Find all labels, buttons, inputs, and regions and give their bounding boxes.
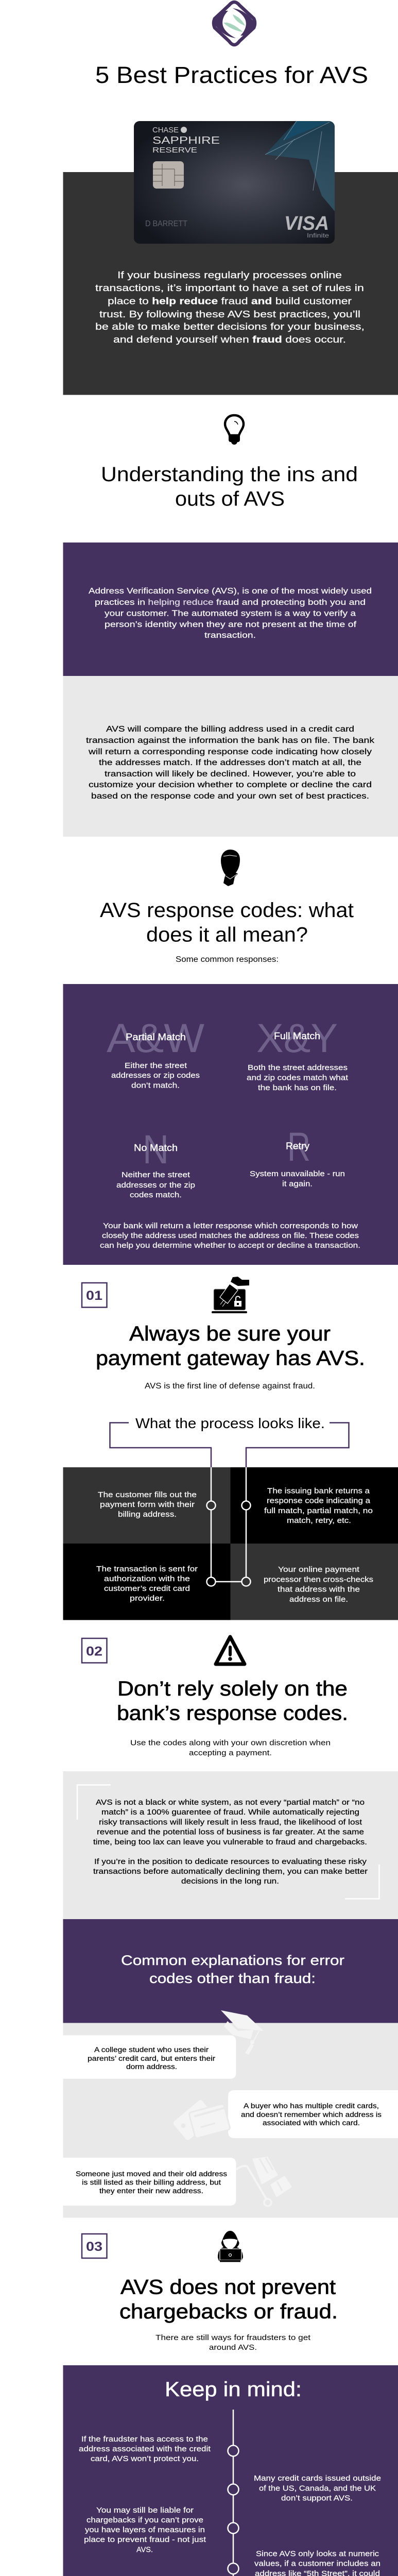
- code: no match: addresses or the zip: [116, 1181, 195, 1190]
- step: billing address: payment form with their: [100, 1501, 195, 1509]
- note: cards outside US: don’t support AVS.: [281, 2495, 353, 2503]
- note: liable for chargebacks: place to prevent fraud - not just: [84, 2536, 206, 2544]
- credit card image: RESERVE: [152, 146, 197, 155]
- code: full match: Full Match: [274, 1030, 320, 1041]
- intro text: and defend yourself when fraud does occur.: [113, 334, 346, 345]
- panel: what AVS is: person’s identity when they are not present at the time of: [105, 620, 357, 629]
- heading: understanding AVS: outs of AVS: [175, 487, 285, 510]
- step: billing address: [98, 1491, 197, 1519]
- subheading: first line of defense: AVS is the first line of defense against fraud.: [145, 1382, 315, 1391]
- card: college student: A college student who uses their: [94, 2046, 209, 2054]
- panel: not black or white: [63, 1771, 398, 1919]
- note: numeric values: [254, 2550, 380, 2576]
- icon: hacker: [218, 2231, 243, 2262]
- logo: [213, 2, 255, 45]
- step: authorization: customer’s credit card: [104, 1585, 190, 1593]
- icon: thinking head: [221, 850, 240, 886]
- code: full match: the bank has on file.: [258, 1084, 337, 1092]
- code: retry: System unavailable - run: [250, 1170, 345, 1178]
- response code summary: Your bank will return a letter response which corresponds to how: [103, 1222, 358, 1230]
- card: multiple credit cards: [228, 2090, 398, 2138]
- icon: hand truck: [236, 2157, 292, 2206]
- card: college student: [63, 2035, 236, 2079]
- heading: AVS response codes: [100, 899, 354, 946]
- code: retry: R: [287, 1124, 310, 1170]
- credit card image: VISA: [284, 213, 329, 234]
- step: billing address: The customer fills out the: [98, 1491, 197, 1499]
- note: fraudster has address: card, AVS won’t protect you.: [91, 2455, 199, 2463]
- panel: not black or white: AVS is not a black or white system, as not every “partial match” or “no: [96, 1799, 365, 1807]
- heading: payment gateway: payment gateway has AVS.: [96, 1347, 365, 1369]
- note: liable for chargebacks: AVS.: [136, 2546, 153, 2554]
- credit card image: SAPPHIRE: [152, 135, 220, 146]
- step: cross-check: processor then cross-checks: [264, 1575, 373, 1584]
- intro text: be able to make better decisions for your business,: [95, 321, 365, 332]
- panel: keep in mind: [63, 2365, 398, 2576]
- credit card image: D BARRETT: [145, 219, 187, 228]
- panel: what AVS is: Address Verification Service (AVS), is one of the most widely used: [89, 587, 372, 596]
- step: response code: match, retry, etc.: [287, 1517, 351, 1525]
- step: cross-check: Your online payment: [278, 1566, 359, 1574]
- note: liable for chargebacks: chargebacks if you can’t prove: [86, 2516, 203, 2524]
- response code summary: can help you determine whether to accept or decline a transaction.: [100, 1242, 360, 1250]
- intro text: If your business regularly processes online: [117, 269, 342, 280]
- card: just moved: they enter their new address.: [99, 2187, 203, 2195]
- process flow lines: [110, 1423, 349, 1586]
- panel: common explanations banner: Common explanations for error: [121, 1953, 344, 1968]
- intro text: place to help reduce fraud and build customer: [108, 296, 352, 306]
- code: no match: No Match: [134, 1142, 178, 1153]
- panel: intro: [63, 121, 398, 395]
- panel: what AVS is: practices in helping reduce fraud and protecting both you and: [95, 598, 366, 607]
- credit card image: Infinite: [307, 232, 329, 239]
- card: college student: parents’ credit card, but enters their: [88, 2055, 216, 2062]
- note: fraudster has address: If the fraudster has access to the: [81, 2435, 208, 2444]
- heading: AVS does not prevent: AVS does not prevent: [120, 2276, 336, 2299]
- badge: 02: 02: [86, 1645, 102, 1659]
- heading: understanding AVS: Understanding the ins and: [101, 463, 358, 486]
- icon: credit cards: [172, 2099, 231, 2141]
- panel: not black or white: If you’re in the position to dedicate resources to evaluating these risky: [94, 1858, 367, 1866]
- panel: how AVS compares addresses: customize your decision whether to complete or decline the card: [89, 781, 372, 789]
- heading: payment gateway: Always be sure your: [129, 1323, 331, 1345]
- note: numeric values: Since AVS only looks at numeric: [256, 2550, 379, 2558]
- heading: response codes: [117, 1677, 348, 1725]
- heading: AVS response codes: AVS response codes: what: [100, 899, 354, 922]
- panel: what AVS is: your customer. The automated system is a way to verify a: [105, 609, 356, 618]
- step: billing address: billing address.: [118, 1511, 177, 1519]
- note: cards outside US: of the US, Canada, and the UK: [259, 2484, 376, 2493]
- subheading: fraudsters get around AVS: [155, 2334, 310, 2352]
- heading: response codes: bank’s response codes.: [117, 1702, 348, 1725]
- card: multiple credit cards: and doesn’t remember which address is: [241, 2111, 382, 2119]
- subheading: discretion: accepting a payment.: [189, 1749, 272, 1757]
- subheading: fraudsters get around AVS: around AVS.: [209, 2344, 257, 2352]
- intro text: [95, 269, 365, 345]
- step: authorization: The transaction is sent for: [96, 1565, 198, 1573]
- panel: not black or white: time, being too lax can leave you vulnerable to fraud and chargebacks.: [93, 1838, 367, 1846]
- heading: AVS does not prevent: chargebacks or fraud.: [119, 2300, 338, 2323]
- code: partial match: Either the street: [125, 1062, 187, 1070]
- icon: laptop with card: [212, 1277, 249, 1313]
- code: no match: [116, 1126, 195, 1199]
- panel: how AVS compares addresses: transaction against the information the bank has on file. The bank: [86, 736, 374, 745]
- credit card image: [134, 121, 335, 244]
- panel: not black or white: match” is a 100% guarentee of fraud. While automatically rejecting: [101, 1808, 359, 1817]
- badge: 01: 01: [86, 1289, 102, 1303]
- step: cross-check: address on file.: [289, 1596, 348, 1604]
- card: just moved: is still listed as their billing address, but: [82, 2179, 221, 2187]
- heading: understanding AVS: [101, 463, 358, 510]
- icon: light bulb: [225, 415, 244, 445]
- card: multiple credit cards: A buyer who has multiple credit cards,: [244, 2102, 379, 2110]
- panel: common explanations banner: codes other than fraud:: [149, 1971, 316, 1986]
- step: authorization: authorization with the: [104, 1575, 190, 1583]
- panel: how AVS compares addresses: will return a corresponding response code indicating how closely: [88, 748, 372, 756]
- panel: what AVS is: transaction.: [204, 631, 256, 640]
- panel: not black or white: decisions in the long run.: [181, 1877, 279, 1886]
- step: response code: The issuing bank returns a: [267, 1487, 370, 1496]
- icon: graduation cap: [221, 2010, 264, 2055]
- heading: AVS response codes: does it all mean?: [146, 923, 308, 946]
- credit card image: CHASE: [152, 126, 179, 134]
- panel: explanations: [63, 2023, 398, 2217]
- code: no match: N: [143, 1126, 169, 1172]
- note: fraudster has address: [79, 2435, 211, 2463]
- icon: warning triangle: [216, 1637, 245, 1664]
- code: no match: Neither the street: [122, 1171, 190, 1179]
- heading: payment gateway: [96, 1323, 365, 1369]
- note: liable for chargebacks: you have layers of measures in: [85, 2526, 205, 2534]
- card: college student: dorm address.: [126, 2063, 177, 2071]
- step: response code: response code indicating a: [267, 1497, 371, 1505]
- badge: 02: [82, 1638, 107, 1663]
- panel: how AVS compares addresses: the addresses match. If the addresses don’t match at all, the: [99, 758, 361, 767]
- code: full match: [247, 1015, 348, 1092]
- step: response code: full match, partial match, no: [264, 1507, 373, 1515]
- response code summary: [100, 1222, 360, 1250]
- badge: 03: [82, 2234, 107, 2258]
- panel: how AVS compares addresses: [63, 676, 398, 837]
- panel: keep in mind: Keep in mind:: [165, 2378, 302, 2401]
- step: response code: [264, 1487, 373, 1525]
- step: authorization: [96, 1565, 198, 1603]
- note: liable for chargebacks: You may still be liable for: [96, 2506, 194, 2515]
- subheading: discretion: [130, 1739, 331, 1757]
- code: partial match: Partial Match: [126, 1031, 186, 1042]
- card: just moved: [63, 2158, 236, 2206]
- code: partial match: don’t match.: [131, 1082, 180, 1090]
- title: 5 Best Practices for AVS: [95, 62, 368, 88]
- subheading: discretion: Use the codes along with your own discretion when: [130, 1739, 331, 1748]
- timeline: [228, 2410, 239, 2576]
- process panels: [63, 1467, 398, 1620]
- note: numeric values: values, if a customer includes an: [254, 2560, 380, 2568]
- step: cross-check: that address with the: [278, 1586, 360, 1594]
- intro text: trust. By following these AVS best practices, you’ll: [99, 309, 360, 319]
- code: full match: Both the street addresses: [248, 1064, 348, 1072]
- code: full match: and zip codes match what: [247, 1074, 348, 1082]
- subheading: fraudsters get around AVS: There are still ways for fraudsters to get: [155, 2334, 310, 2342]
- subheading: common responses: Some common responses:: [176, 955, 279, 964]
- code: full match: X&Y: [256, 1015, 338, 1061]
- code: retry: [250, 1124, 345, 1188]
- note: cards outside US: Many credit cards issued outside: [254, 2475, 381, 2483]
- panel: how AVS compares addresses: AVS will compare the billing address used in a credit card: [106, 725, 354, 734]
- note: liable for chargebacks: [84, 2506, 206, 2554]
- step: cross-check: [264, 1566, 373, 1604]
- code: partial match: A&W: [107, 1015, 204, 1061]
- code: retry: it again.: [282, 1180, 313, 1188]
- code: partial match: addresses or zip codes: [111, 1072, 200, 1080]
- heading: AVS does not prevent: [119, 2276, 338, 2323]
- process heading: What the process looks like.: [135, 1415, 325, 1431]
- badge: 03: 03: [86, 2240, 102, 2254]
- note: fraudster has address: address associated with the credit: [79, 2445, 211, 2453]
- step: authorization: provider.: [130, 1595, 165, 1603]
- response code summary: closely the address used matches the address on file. These codes: [102, 1232, 359, 1240]
- panel: what AVS is: [63, 543, 398, 676]
- code: retry: Retry: [286, 1141, 310, 1151]
- card: just moved: Someone just moved and their old address: [76, 2170, 227, 2178]
- badge: 01: [82, 1283, 107, 1308]
- heading: response codes: Don’t rely solely on the: [117, 1677, 348, 1700]
- code: no match: codes match.: [130, 1191, 182, 1199]
- note: cards outside US: [254, 2475, 381, 2503]
- code: partial match: [107, 1015, 204, 1090]
- card: multiple credit cards: associated with which card.: [263, 2119, 360, 2127]
- panel: how AVS compares addresses: based on the response code and your own set of best practices.: [91, 792, 369, 801]
- panel: not black or white: revenue and the potential loss of business is far greater. At the same: [97, 1828, 364, 1837]
- panel: how AVS compares addresses: transaction will likely be declined. However, you’re able to: [105, 770, 356, 778]
- panel: not black or white: risky transactions will likely result in less fraud, the likelihood of lost: [99, 1819, 362, 1827]
- panel: common explanations banner: [63, 1919, 398, 2023]
- panel: not black or white: transactions before automatically declining them, you can make better: [93, 1868, 368, 1876]
- panel: response codes: [63, 984, 398, 1265]
- intro text: transactions, it’s important to have a set of rules in: [95, 282, 364, 293]
